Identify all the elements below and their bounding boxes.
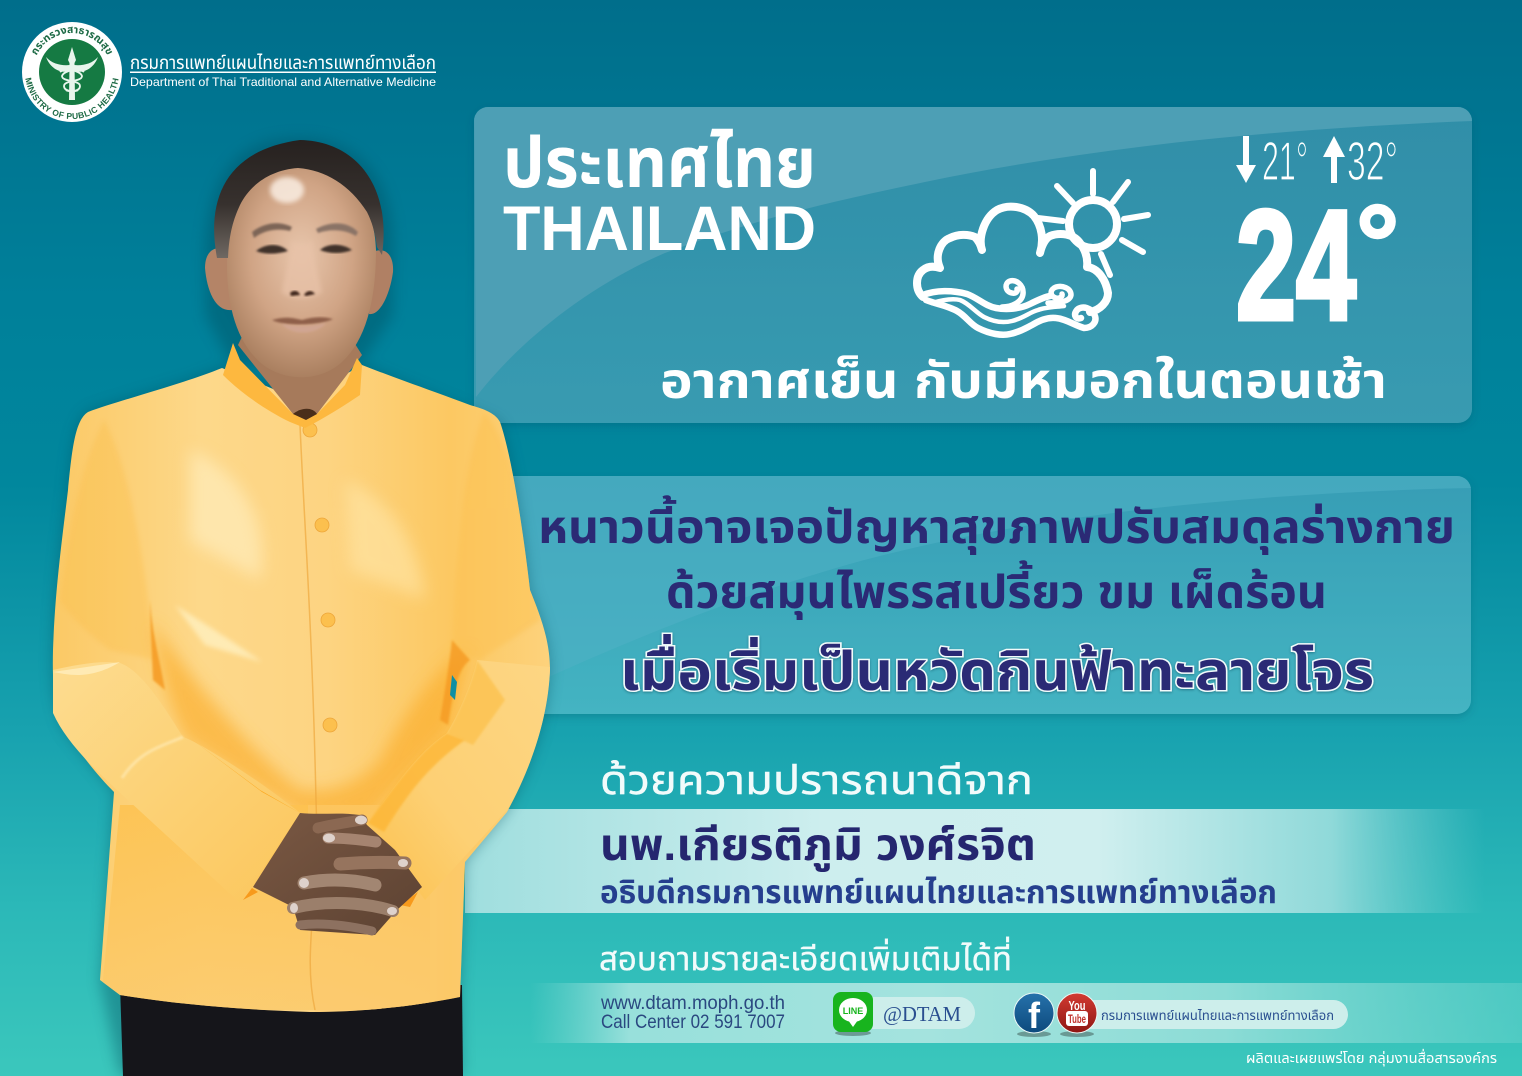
high temperature	[1323, 130, 1398, 192]
low temperature: 21°	[1262, 130, 1308, 192]
weather description: อากาศเย็น กับมีหมอกในตอนเช้า	[660, 353, 1387, 409]
left sleeve	[53, 662, 300, 903]
department name english: Department of Thai Traditional and Alternative Medicine	[130, 75, 436, 89]
head	[214, 140, 384, 377]
band: contact channels	[530, 983, 1522, 1043]
icon: LINE: LINE	[843, 1006, 863, 1016]
current temperature: °	[1356, 182, 1399, 303]
header: department logo and name	[22, 22, 436, 122]
face	[227, 166, 376, 377]
current temperature: 24	[1236, 179, 1356, 353]
neck shadow	[293, 409, 317, 420]
nose	[282, 240, 322, 298]
panel: Thailand weather	[474, 107, 1472, 423]
hair	[214, 140, 384, 258]
mouth	[272, 317, 333, 324]
right sleeve	[368, 660, 550, 900]
facebook youtube pill	[1060, 1000, 1348, 1029]
signatory name: นพ.เกียรติภูมิ วงศ์รจิต	[600, 821, 1036, 872]
signatory title: อธิบดีกรมการแพทย์แผนไทยและการแพทย์ทางเลือก	[600, 874, 1277, 910]
band: signatory	[465, 809, 1485, 913]
icon: ministry of public health seal	[22, 22, 122, 122]
icon: facebook: f	[1028, 995, 1041, 1036]
facebook youtube pill: กรมการแพทย์แผนไทยและการแพทย์ทางเลือก	[1101, 1008, 1334, 1023]
LINE id pill: @DTAM	[883, 1002, 961, 1026]
advice line 3 highlighted: เมื่อเริ่มเป็นหวัดกินฟ้าทะลายโจร	[620, 634, 1374, 702]
icon: LINE	[833, 992, 873, 1036]
panel: herbal advice	[470, 476, 1471, 714]
LINE id pill	[855, 997, 975, 1029]
jacket body folds	[154, 626, 474, 805]
icon: youtube	[1057, 993, 1097, 1037]
eyebrows	[252, 223, 292, 238]
left ear	[205, 248, 232, 310]
icon: ministry of public health seal: กระทรวงสาธารณสุข	[32, 26, 112, 55]
heading: country thai: ประเทศไทย	[503, 124, 816, 202]
collar	[223, 343, 362, 428]
department name thai: กรมการแพทย์แผนไทยและการแพทย์ทางเลือก	[130, 53, 436, 74]
jacket	[53, 365, 550, 1012]
call center: Call Center 02 591 7007	[601, 1012, 785, 1033]
icon: sun and cloud with fog	[917, 171, 1148, 335]
advice line 2: ด้วยสมุนไพรรสเปรี้ยว ขม เผ็ดร้อน	[666, 560, 1327, 620]
contact heading: สอบถามรายละเอียดเพิ่มเติมได้ที่	[599, 936, 1012, 977]
low temperature	[1236, 130, 1308, 192]
icon: youtube: Tube	[1068, 1012, 1086, 1026]
eyes	[256, 245, 288, 254]
advice line 1: หนาวนี้อาจเจอปัญหาสุขภาพปรับสมดุลร่างกาย	[538, 495, 1455, 555]
icon: facebook	[1014, 993, 1054, 1037]
jacket buttons	[303, 423, 337, 732]
website: www.dtam.moph.go.th	[600, 993, 785, 1014]
high temperature: 32°	[1347, 130, 1398, 192]
placket line	[300, 425, 317, 1010]
icon: ministry of public health seal: MINISTRY OF PUBLIC HEALTH	[25, 78, 118, 119]
figure: man in yellow silk jacket	[53, 138, 550, 1076]
trousers	[120, 985, 463, 1076]
icon: youtube: You	[1068, 998, 1086, 1013]
production credit: ผลิตและเผยแพร่โดย กลุ่มงานสื่อสารองค์กร	[1246, 1048, 1497, 1067]
forehead highlight	[270, 177, 304, 203]
clasped hands	[253, 813, 422, 935]
shoulder seams	[60, 420, 155, 660]
gap between right arm and body	[450, 675, 457, 700]
neck	[238, 320, 362, 414]
greeting text: ด้วยความปรารถนาดีจาก	[600, 759, 1033, 803]
heading: country english: THAILAND	[503, 194, 816, 264]
figure shadow	[53, 138, 550, 1076]
right ear	[369, 250, 393, 314]
